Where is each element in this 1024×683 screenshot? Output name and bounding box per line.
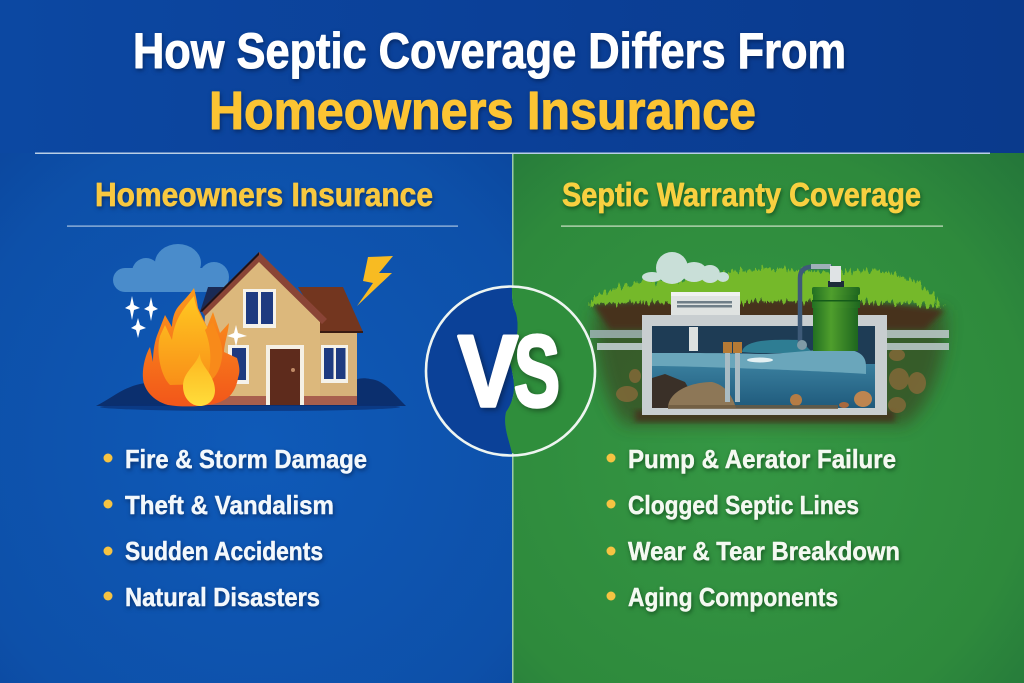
panel: header band (0, 0, 1024, 153)
back roof (200, 287, 224, 312)
concrete tank (642, 315, 887, 415)
badge ring (426, 286, 595, 456)
badge left half (426, 288, 518, 453)
risers (723, 342, 742, 402)
illustration: septic system cross-section (590, 252, 949, 425)
sludge (652, 374, 872, 409)
title line two: Homeowners Insurance (209, 81, 756, 141)
VS badge (426, 286, 595, 456)
icon: lightning bolt (357, 256, 393, 306)
title line one: How Septic Coverage Differs From (133, 23, 846, 79)
discharge pipe (797, 264, 841, 350)
inlet pipes (590, 330, 949, 350)
item: pump and aerator failure: Pump & Aerator Failure (628, 444, 896, 474)
item: clogged septic lines: Clogged Septic Lines (628, 490, 859, 520)
soil glow (594, 310, 946, 425)
upper window (243, 289, 276, 328)
item: wear and tear breakdown: Wear & Tear Breakdown (628, 536, 900, 566)
list: septic coverage items (606, 444, 900, 612)
door (266, 345, 304, 405)
house wing roof (298, 287, 363, 332)
icons: sparkles (125, 296, 158, 338)
panel: left blue background (0, 153, 513, 683)
icon: storm cloud (113, 244, 229, 292)
illustration: house on fire (96, 244, 406, 411)
house roof (201, 252, 327, 324)
tank interior (652, 326, 875, 408)
item: aging components: Aging Components (628, 582, 838, 612)
heading: homeowners insurance: Homeowners Insurance (95, 176, 433, 213)
soil top band (592, 299, 945, 330)
title (133, 23, 846, 141)
cloud (642, 252, 729, 284)
item: natural disasters: Natural Disasters (125, 582, 320, 612)
list: homeowners coverage items (104, 444, 367, 612)
pump tank (812, 281, 860, 351)
baffle (689, 327, 698, 351)
panel: right green background (513, 153, 1024, 683)
icon: flames (143, 288, 239, 406)
base trim (205, 396, 357, 405)
icon: sparkle on wall (227, 325, 247, 347)
item: sudden accidents: Sudden Accidents (125, 536, 323, 566)
letter V: V (458, 316, 518, 428)
access lid (671, 292, 740, 317)
grass (590, 268, 942, 307)
water (652, 364, 875, 408)
heading: septic warranty coverage: Septic Warranty Coverage (562, 176, 921, 213)
soil under tank (635, 410, 895, 422)
badge right half (505, 288, 595, 453)
soil stones (616, 349, 926, 413)
panel: homeowners insurance column (67, 176, 458, 612)
item: theft and vandalism: Theft & Vandalism (125, 490, 334, 520)
panel: septic warranty column (561, 176, 949, 612)
letter S: S (514, 316, 560, 428)
item: fire and storm damage: Fire & Storm Damage (125, 444, 367, 474)
right window (321, 345, 348, 383)
house main wall (200, 260, 320, 405)
lower left window (228, 345, 249, 384)
house wing wall (320, 333, 357, 405)
ground shadow (96, 378, 406, 406)
